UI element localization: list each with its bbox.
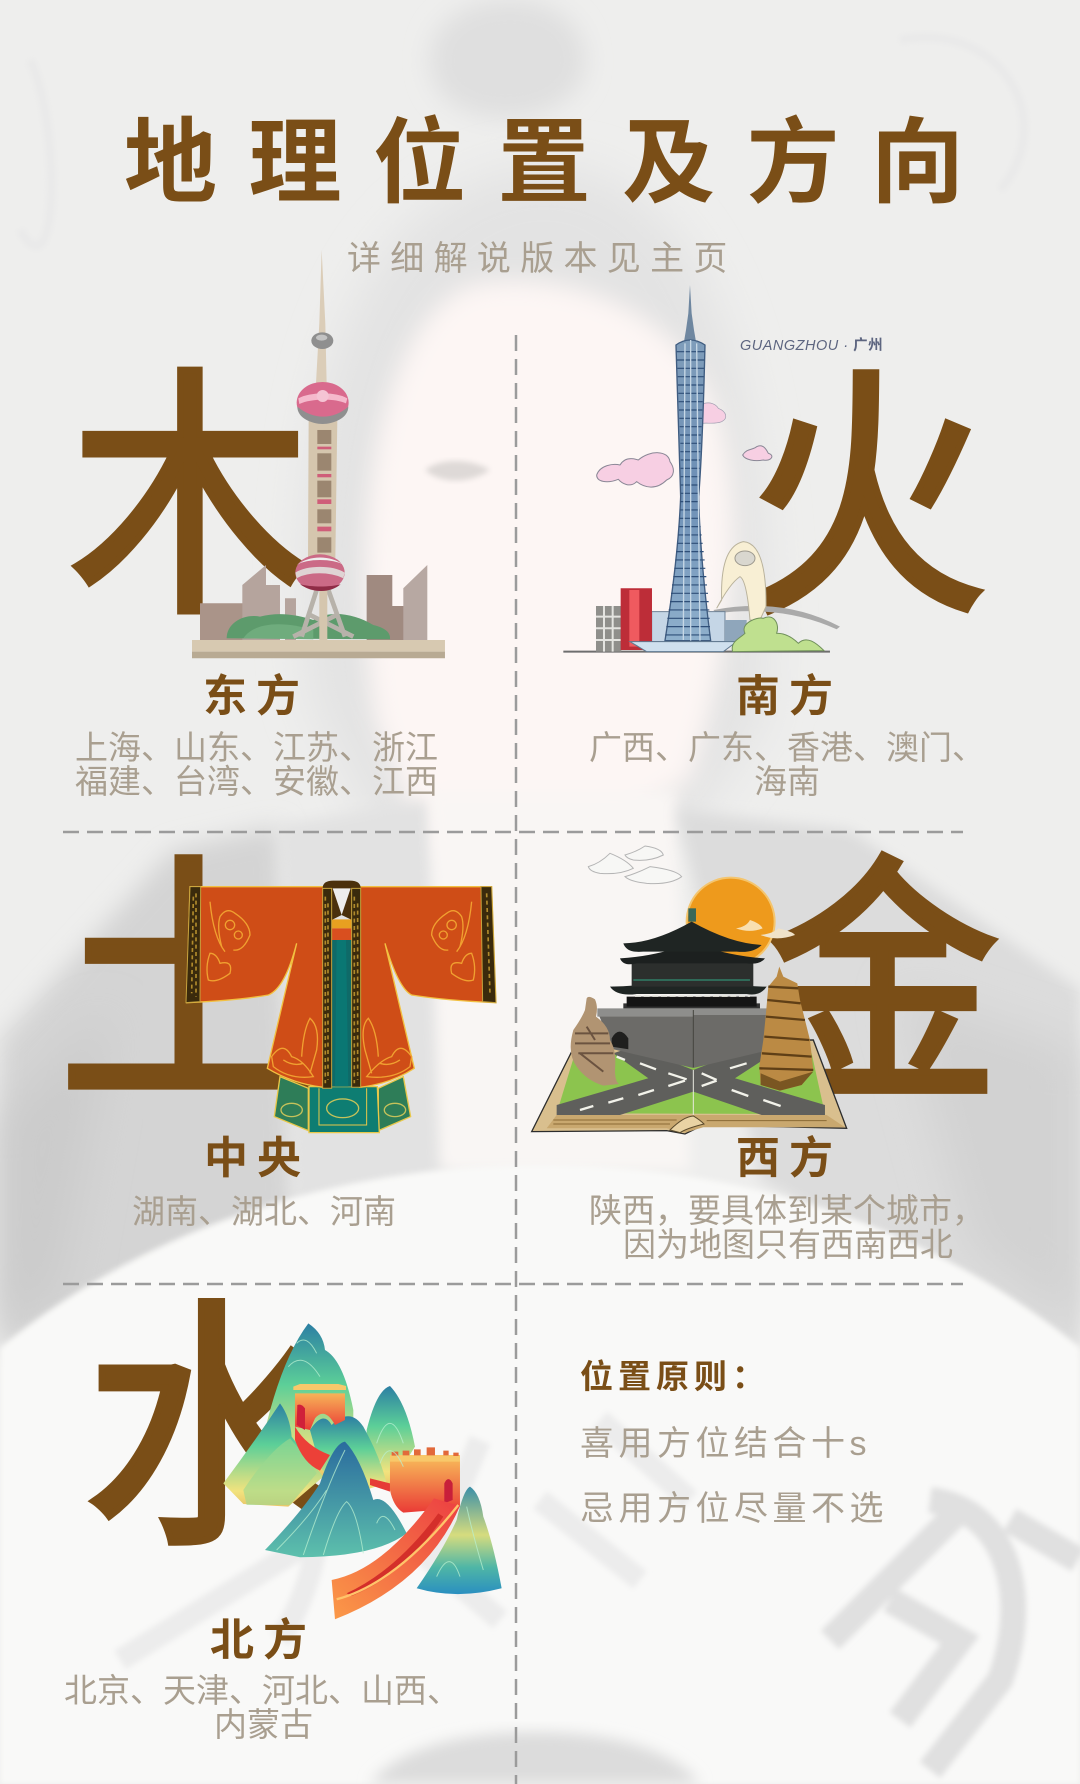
principle: favourable: 喜用方位结合十s — [580, 1425, 871, 1463]
west note: 因为地图只有西南西北 — [623, 1226, 953, 1263]
panel: center — [58, 840, 496, 1230]
west note: 陕西，要具体到某个城市， — [589, 1192, 985, 1229]
panel: north — [64, 1283, 502, 1743]
icon: Great Wall mountains — [223, 1323, 502, 1619]
grid dividers — [63, 335, 963, 1784]
north provinces: 内蒙古 — [214, 1706, 313, 1743]
icon: Canton Tower — [563, 285, 840, 653]
caption: Guangzhou: GUANGZHOU · 广州 — [740, 336, 883, 354]
big character: wood: 木 — [69, 354, 311, 646]
icon: Oriental Pearl Tower — [192, 250, 445, 658]
center provinces: 湖南、湖北、河南 — [132, 1193, 396, 1230]
big character: water: 水 — [84, 1283, 338, 1577]
panel: west — [532, 839, 1000, 1263]
heading: south: 南方 — [736, 672, 842, 721]
panel: position principles — [580, 1358, 888, 1528]
principle: unfavourable: 忌用方位尽量不选 — [580, 1490, 888, 1528]
north provinces: 北京、天津、河北、山西、 — [64, 1672, 460, 1709]
big character: metal: 金 — [766, 839, 1000, 1133]
panel: east — [69, 250, 445, 800]
heading: east: 东方 — [203, 672, 309, 721]
heading: north: 北方 — [210, 1616, 316, 1665]
heading: principles: 位置原则： — [580, 1358, 770, 1395]
heading: center: 中央 — [204, 1134, 310, 1183]
big character: fire: 火 — [744, 353, 988, 646]
panel: south — [563, 285, 988, 800]
heading: west: 西方 — [736, 1134, 842, 1183]
icon: Xi'an bell tower on book — [532, 846, 847, 1134]
subtitle: 详细解说版本见主页 — [347, 240, 737, 278]
icon: hanfu robe — [186, 881, 496, 1133]
east provinces: 上海、山东、江苏、浙江 — [75, 729, 438, 766]
south provinces: 广西、广东、香港、澳门、 — [589, 729, 985, 766]
title: 地理位置及方向 — [124, 111, 996, 215]
big character: earth: 土 — [58, 840, 320, 1133]
south provinces: 海南 — [754, 763, 820, 800]
east provinces: 福建、台湾、安徽、江西 — [75, 763, 438, 800]
